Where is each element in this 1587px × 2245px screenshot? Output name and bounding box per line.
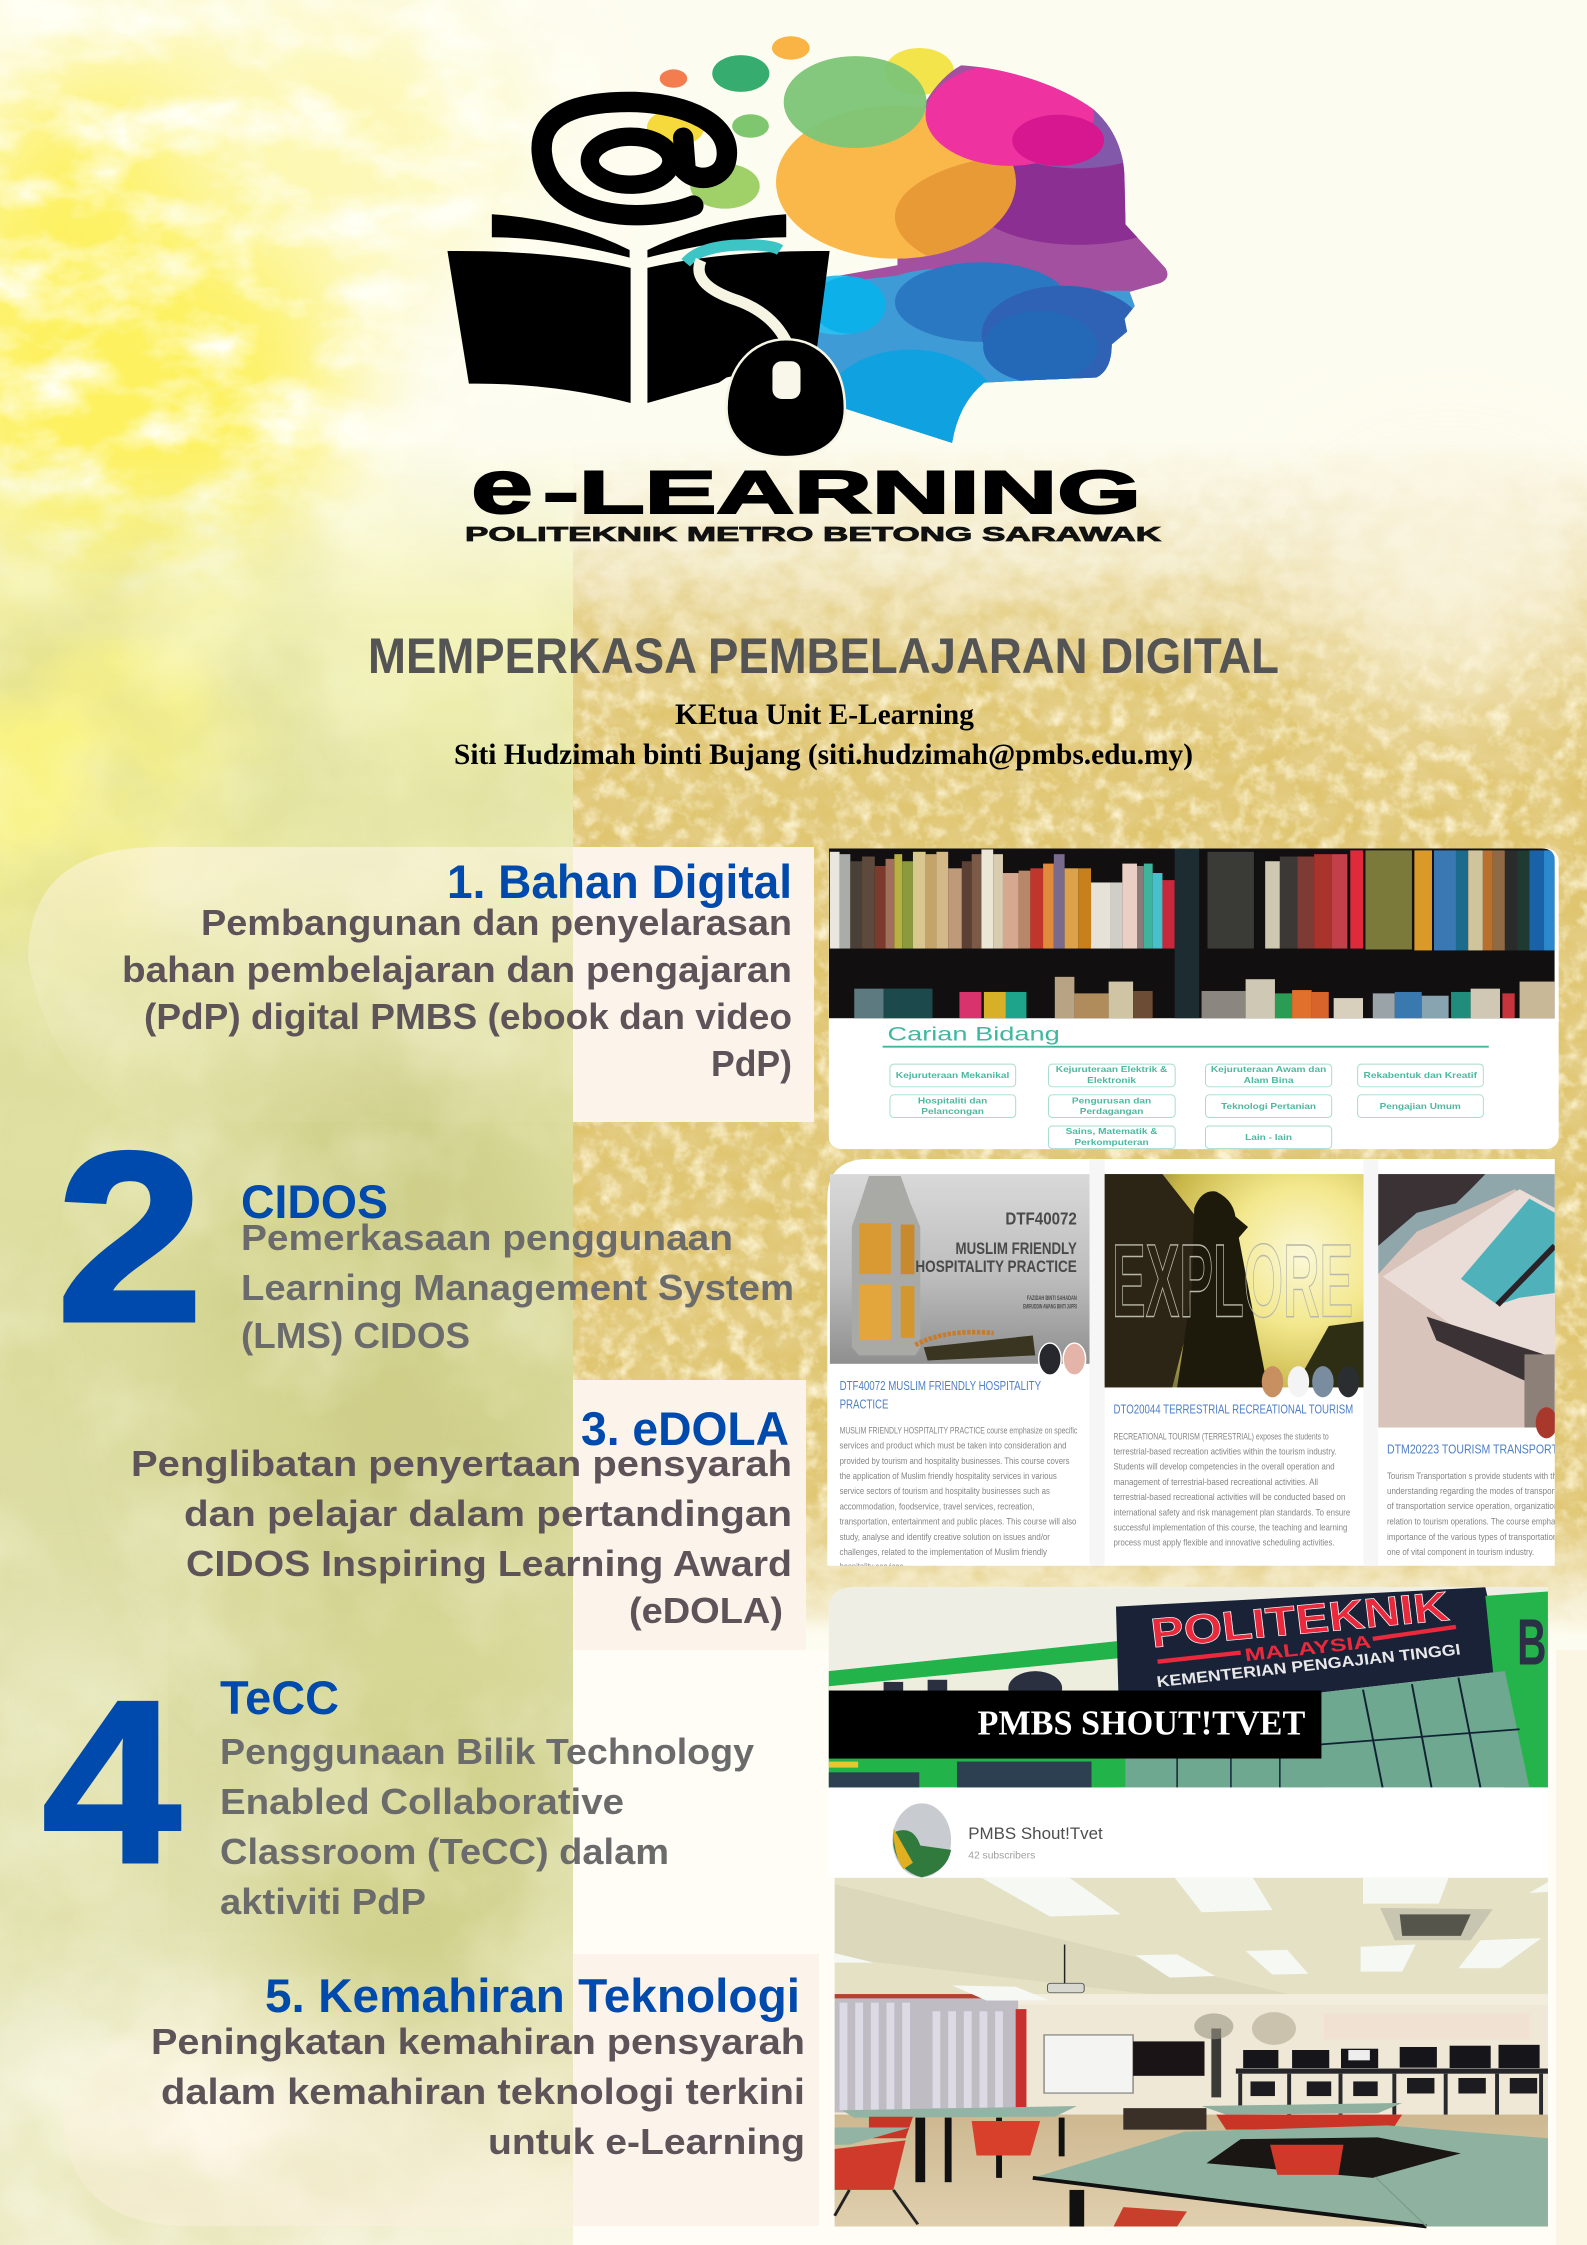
card: DTO20044: management of terrestrial-based recreational activities. All <box>1114 1477 1318 1487</box>
heading: TeCC <box>220 1671 339 1724</box>
heading: 3. eDOLA <box>581 1402 789 1455</box>
card: DTO20044: international safety and risk management plan standards. To ensure <box>1114 1507 1350 1517</box>
left watercolour wash <box>0 440 573 2245</box>
card: DTF40072: service sectors of tourism and hospitality businesses such as <box>840 1486 1050 1496</box>
card: DTF40072: hospitality services. <box>840 1562 906 1572</box>
card: DTF40072: accommodation, foodservice, travel services, recreation, <box>840 1502 1034 1512</box>
card: DTM20223: one of vital component in tourism industry. <box>1387 1547 1534 1557</box>
card: DTO20044: successful implementation of this course, the teaching and learning <box>1114 1523 1347 1532</box>
banner title: PMBS SHOUT!TVET <box>978 1704 1305 1743</box>
description: (PdP) digital PMBS (ebook dan video <box>144 996 792 1037</box>
field search buttons: Kejuruteraan Awam dan <box>1211 1065 1326 1074</box>
card: DTF40072: MUSLIM FRIENDLY <box>956 1238 1077 1258</box>
channel avatar <box>892 1803 951 1877</box>
logo: e-Learning Politeknik Metro Betong Sarawak <box>447 36 1201 546</box>
sign text <box>1148 1584 1462 1691</box>
field search buttons: Perkomputeran <box>1074 1138 1149 1147</box>
card: DTF40072: challenges, related to the implementation of Muslim friendly <box>840 1547 1047 1557</box>
description: Peningkatan kemahiran pensyarah <box>151 2021 805 2062</box>
field search buttons: Pengajian Umum <box>1380 1102 1461 1111</box>
photo: politeknik building banner <box>829 1584 1548 1787</box>
title: MEMPERKASA PEMBELAJARAN DIGITAL <box>368 628 1279 684</box>
description: Enabled Collaborative <box>220 1781 624 1822</box>
description: CIDOS Inspiring Learning Award <box>186 1543 792 1584</box>
photo: bookshelf <box>829 848 1555 1018</box>
description: Pemerkasaan penggunaan <box>241 1217 733 1258</box>
sign text: KEMENTERIAN PENGAJIAN TINGGI <box>1156 1640 1462 1691</box>
description: untuk e-Learning <box>488 2121 805 2162</box>
heading: carian bidang: Carian Bidang <box>888 1024 1060 1045</box>
heading: CIDOS <box>241 1175 388 1228</box>
field search buttons: Hospitaliti dan <box>918 1096 987 1105</box>
description: Penggunaan Bilik Technology <box>220 1731 754 1772</box>
description: PdP) <box>711 1043 792 1084</box>
sign text: MALAYSIA <box>1243 1632 1373 1666</box>
icon: head and colour bubbles <box>647 36 1201 477</box>
description: (eDOLA) <box>629 1590 783 1631</box>
field search buttons: Kejuruteraan Mekanikal <box>896 1071 1009 1080</box>
icon: at sign, open book and mouse <box>447 102 845 457</box>
field search buttons: Teknologi Pertanian <box>1221 1102 1316 1111</box>
number 2: 2 <box>57 1103 203 1371</box>
field search buttons: Alam Bina <box>1244 1076 1294 1085</box>
channel name: PMBS Shout!Tvet <box>968 1824 1103 1843</box>
panel: kemahiran teknologi backdrop <box>63 1954 819 2226</box>
description: bahan pembelajaran dan pengajaran <box>122 949 792 990</box>
description <box>131 1443 792 1631</box>
description: dalam kemahiran teknologi terkini <box>161 2071 805 2112</box>
heading: 5. Kemahiran Teknologi <box>265 1969 800 2022</box>
card: DTF40072: FAZIDAH BINTI SAHADAN <box>1027 1295 1077 1302</box>
card: DTO20044: DTO20044 TERRESTRIAL RECREATIONAL TOURISM <box>1114 1402 1353 1416</box>
sign text: POLITEKNIK <box>1148 1584 1452 1657</box>
field search buttons: Pengurusan dan <box>1072 1096 1151 1105</box>
author role: KEtua Unit E-Learning <box>675 698 974 731</box>
card: DTF40072: PRACTICE <box>840 1397 889 1412</box>
section 3: eDOLA <box>131 1402 792 1631</box>
section 1: bahan digital <box>122 855 792 1084</box>
card: DTF40072: the application of Muslim friendly hospitality services in various <box>840 1471 1057 1481</box>
photo: technology enabled classroom <box>835 1878 1548 2227</box>
card: DTO20044: terrestrial-based recreational activities will be conducted based on <box>1114 1492 1345 1502</box>
panel: eDOLA backdrop <box>573 1380 806 1650</box>
card: DTF40072: transportation, entertainment and public places. This course will also <box>840 1517 1076 1527</box>
card: DTF40072: DTF40072 MUSLIM FRIENDLY HOSPITALITY <box>840 1378 1041 1393</box>
description: (LMS) CIDOS <box>241 1315 470 1356</box>
field search buttons: Pelancongan <box>921 1107 984 1116</box>
logo wordmark: -LEARNING <box>543 459 1141 526</box>
field search buttons: Sains, Matematik & <box>1066 1127 1158 1136</box>
card: DTO20044: RECREATIONAL TOURISM (TERRESTRIAL) exposes the students to <box>1114 1431 1329 1441</box>
description <box>241 1217 794 1356</box>
section 2: CIDOS <box>57 1103 794 1371</box>
description <box>220 1731 754 1922</box>
logo wordmark: e <box>471 445 533 530</box>
section 4: TeCC <box>42 1653 754 1922</box>
description: Learning Management System <box>241 1267 794 1308</box>
subscriber count: 42 subscribers <box>968 1850 1036 1861</box>
field search buttons <box>890 1064 1483 1149</box>
panel: bahan digital backdrop <box>28 847 814 1122</box>
field search buttons: Kejuruteraan Elektrik & <box>1056 1065 1167 1074</box>
card: DTF40072: services and product which must be taken into consideration and <box>840 1441 1067 1451</box>
card: DTO20044: Students will develop competencies in the overall operation and <box>1114 1462 1335 1471</box>
logo subtitle: POLITEKNIK METRO BETONG SARAWAK <box>465 524 1162 546</box>
panel: PMBS Shout!Tvet channel and classroom <box>829 1584 1548 2227</box>
description: Pembangunan dan penyelarasan <box>201 902 792 943</box>
card: DTO20044: terrestrial-based recreation activities within the tourism industry. <box>1114 1447 1337 1456</box>
card: DTF40072 <box>830 1174 1090 1572</box>
card: DTO20044: process must apply flexible and innovative scheduling activities. <box>1114 1538 1335 1547</box>
photo: politeknik building banner: B <box>1517 1606 1546 1679</box>
card: DTO20044 <box>1105 1174 1364 1547</box>
card: DTF40072: HOSPITALITY PRACTICE <box>915 1256 1077 1276</box>
card: DTF40072: study, analyse and identify creative solution on issues and/or <box>840 1532 1050 1542</box>
field search buttons: Lain - lain <box>1245 1133 1292 1142</box>
field search buttons: Rekabentuk dan Kreatif <box>1364 1071 1477 1080</box>
description: aktiviti PdP <box>220 1881 426 1922</box>
card: DTF40072: provided by tourism and hospitality businesses. This course covers <box>840 1456 1070 1466</box>
card: DTM20223 <box>1378 1174 1555 1557</box>
panel: digital library screenshot <box>829 848 1559 1149</box>
field search buttons: Elektronik <box>1087 1076 1137 1085</box>
panel: CIDOS course cards <box>827 1159 1587 1572</box>
heading: 1. Bahan Digital <box>447 855 792 908</box>
field search buttons: Perdagangan <box>1080 1107 1143 1116</box>
number 4: 4 <box>42 1653 181 1912</box>
section 5: kemahiran teknologi <box>151 1969 805 2162</box>
description <box>122 902 792 1084</box>
description: Penglibatan penyertaan pensyarah <box>131 1443 792 1484</box>
author name and email: Siti Hudzimah binti Bujang (siti.hudzimah@pmbs.edu.my) <box>454 738 1193 771</box>
card: DTF40072: MUSLIM FRIENDLY HOSPITALITY PRACTICE course emphasize on specific <box>840 1426 1078 1436</box>
card: DTF40072: DTF40072 <box>1005 1208 1077 1229</box>
card: DTF40072: EMIRUDDIN AWANG BINTI JUPRI <box>1023 1304 1077 1311</box>
description <box>151 2021 805 2162</box>
description: dan pelajar dalam pertandingan <box>184 1493 792 1534</box>
description: Classroom (TeCC) dalam <box>220 1831 669 1872</box>
card: DTM20223: of transportation service operation, organization in <box>1387 1501 1567 1511</box>
